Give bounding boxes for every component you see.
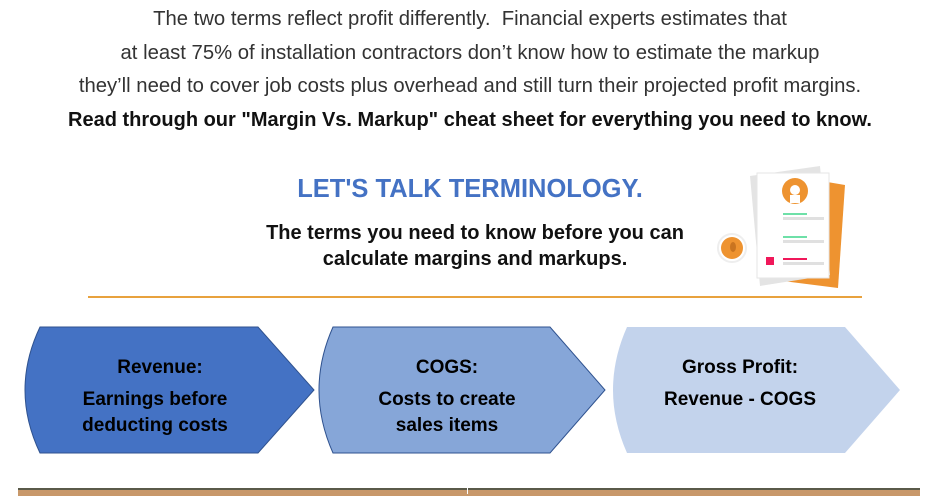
arrow: cogs: COGS: [416, 357, 478, 378]
intro paragraph [68, 8, 872, 131]
intro paragraph: they’ll need to cover job costs plus overhead and still turn their projected profit margins. [79, 75, 861, 97]
arrow: gross profit: Gross Profit: [682, 357, 798, 378]
arrow: cogs [319, 327, 605, 453]
arrows [24, 326, 900, 454]
intro paragraph: Read through our "Margin Vs. Markup" cheat sheet for everything you need to know. [68, 109, 872, 131]
divider orange [88, 296, 862, 298]
title: LET'S TALK TERMINOLOGY. [297, 175, 643, 203]
subtitle: calculate margins and markups. [323, 248, 627, 270]
arrow: cogs: sales items [396, 415, 498, 436]
subtitle: The terms you need to know before you can [266, 222, 684, 244]
arrow: revenue [25, 327, 314, 453]
intro paragraph: The two terms reflect profit differently. Financial experts estimates that [153, 8, 787, 30]
arrow: cogs: Costs to create [378, 389, 516, 410]
arrow: revenue: Earnings before [83, 389, 227, 410]
intro paragraph: at least 75% of installation contractors don’t know how to estimate the markup [121, 42, 819, 64]
bottom table edge [18, 488, 920, 496]
arrow: gross profit [613, 327, 900, 453]
icon: documents [717, 166, 845, 288]
arrow: revenue: deducting costs [82, 415, 228, 436]
subtitle [266, 222, 684, 270]
arrow: revenue: Revenue: [117, 357, 203, 378]
arrow: gross profit: Revenue - COGS [664, 389, 816, 410]
